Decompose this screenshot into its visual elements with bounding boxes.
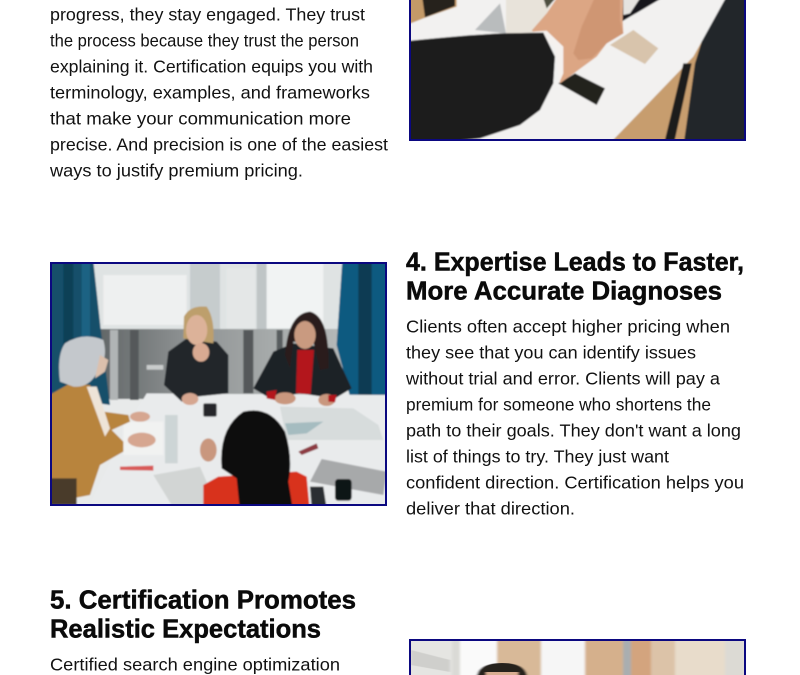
text block: section 4 body: list of things to try. They just want xyxy=(406,446,669,466)
text block: section 4 body xyxy=(405,316,744,518)
photo: four women in a meeting at a table xyxy=(43,255,393,512)
text block: section 3 body: ways to justify premium pricing. xyxy=(49,160,303,180)
window curtain, upper xyxy=(94,264,341,328)
text block: section 4 body: confident direction. Certification helps you xyxy=(406,472,744,492)
heading: section 5 xyxy=(50,584,356,644)
heading: section 4 xyxy=(406,246,744,306)
heading: section 5: Realistic Expectations xyxy=(50,614,321,644)
photo: man in a bright office, cropped at the top of his head xyxy=(410,640,745,675)
text block: section 3 body: the process because they trust the person xyxy=(50,30,359,50)
text block: section 3 body: precise. And precision is one of the easiest xyxy=(50,134,388,154)
woman centre in black xyxy=(164,338,228,402)
text block: section 5 body: Certified search engine optimization xyxy=(50,654,340,674)
text block: section 4 body: they see that you can identify issues xyxy=(406,342,696,362)
heading: section 4: 4. Expertise Leads to Faster, xyxy=(406,246,744,276)
table xyxy=(142,392,385,474)
text block: section 4 body: deliver that direction. xyxy=(406,498,575,518)
text block: section 4 body: Clients often accept higher pricing when xyxy=(406,316,730,336)
text block: section 4 body: premium for someone who shortens the xyxy=(406,394,711,414)
text block: section 3 body: progress, they stay engaged. They trust xyxy=(50,4,365,24)
woman left in tan jacket xyxy=(47,383,130,503)
text block: section 3 body: explaining it. Certification equips you with xyxy=(50,56,373,76)
heading: section 5: 5. Certification Promotes xyxy=(50,584,356,614)
woman right in red sweater xyxy=(253,343,352,398)
text block: section 3 body: that make your communication more xyxy=(50,108,351,128)
text block: section 4 body: without trial and error. Clients will pay a xyxy=(405,368,720,388)
teal drapes xyxy=(52,264,111,406)
woman foreground with curly hair xyxy=(202,470,310,504)
text block: section 4 body: path to their goals. They don't want a long xyxy=(406,420,741,440)
heading: section 4: More Accurate Diagnoses xyxy=(406,276,722,306)
text block: section 3 body: terminology, examples, and frameworks xyxy=(50,82,370,102)
photo: handshake over a desk xyxy=(403,0,753,147)
text block: section 3 body xyxy=(49,4,388,180)
